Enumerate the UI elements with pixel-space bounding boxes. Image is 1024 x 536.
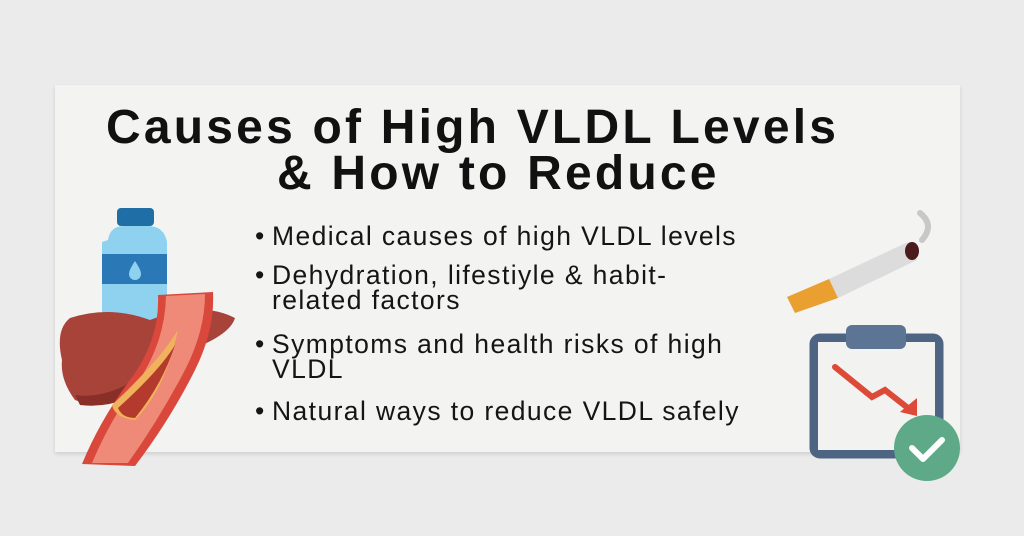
bullet list: • — [255, 221, 266, 251]
bullet list: • — [255, 396, 266, 426]
icon: cigarette — [787, 213, 928, 313]
icon: check circle — [894, 415, 960, 481]
bullet list: VLDL — [272, 354, 344, 384]
bullet list: Medical causes of high VLDL levels — [272, 221, 737, 251]
icon: liver — [60, 309, 235, 406]
bullet list: Symptoms and health risks of high — [272, 329, 723, 359]
bullet list: • — [255, 329, 266, 359]
bullet list — [255, 221, 740, 426]
icon: water bottle — [102, 208, 167, 320]
bullet list: Natural ways to reduce VLDL safely — [272, 396, 740, 426]
title — [106, 101, 839, 200]
bullet list: • — [255, 260, 266, 290]
bullet list: Dehydration, lifestiyle & habit- — [272, 260, 667, 290]
title: Causes of High VLDL Levels — [106, 101, 839, 154]
icon: clipboard with downward chart — [814, 325, 939, 454]
title: & How to Reduce — [277, 147, 720, 200]
icon: artery — [82, 292, 213, 466]
panel — [55, 85, 960, 452]
bullet list: related factors — [272, 285, 461, 315]
